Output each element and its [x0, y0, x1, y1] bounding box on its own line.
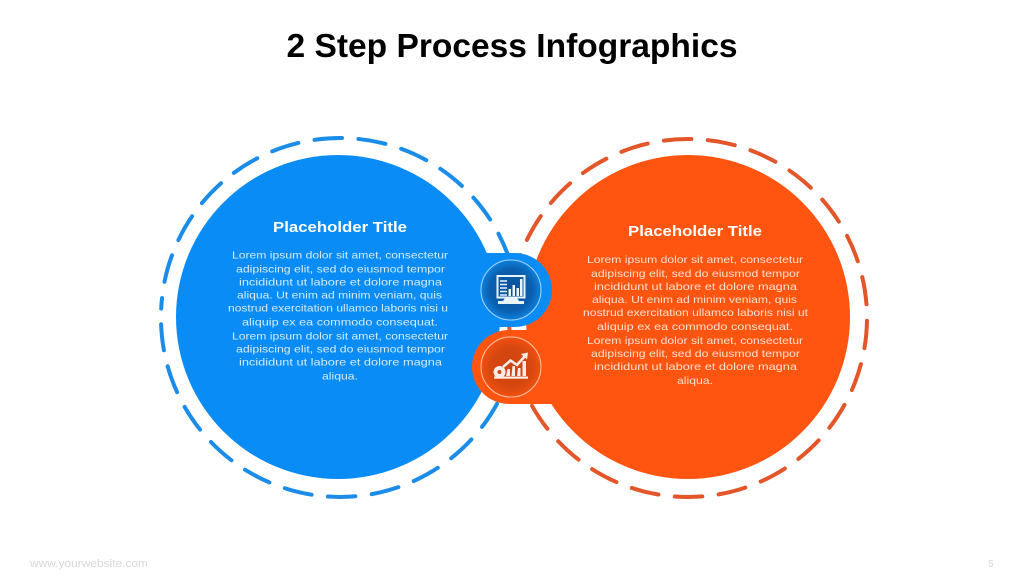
text block: blue panel: aliqua. Ut enim ad minim veniam, quis: [237, 290, 442, 302]
panel: orange circle: [526, 155, 850, 479]
text block: orange panel: incididunt ut labore et dolore magna: [594, 361, 797, 373]
title: 2 Step Process Infographics: [286, 27, 738, 64]
text block: blue panel: [228, 219, 449, 382]
footer: page number: 5: [988, 559, 994, 570]
text block: orange panel: aliqua. Ut enim ad minim veniam, quis: [592, 294, 797, 306]
text block: blue panel: incididunt ut labore et dolore magna: [239, 276, 442, 288]
text block: blue panel: Lorem ipsum dolor sit amet, consectetur: [232, 250, 449, 262]
text block: orange panel: incididunt ut labore et dolore magna: [594, 281, 797, 293]
text block: orange panel: Lorem ipsum dolor sit amet, consectetur: [587, 254, 804, 266]
orange step tab: [472, 330, 553, 404]
text block: blue panel: Lorem ipsum dolor sit amet, consectetur: [232, 330, 449, 342]
text block: blue panel: nostrud exercitation ullamco laboris nisi u: [228, 302, 448, 314]
dashed ring: blue: [161, 138, 519, 497]
heading: blue panel: Placeholder Title: [273, 219, 407, 236]
icon: growth chart with coin: [481, 337, 541, 397]
footer: website: www.yourwebsite.com: [29, 558, 148, 570]
dashed ring: orange: [476, 106, 900, 530]
panel: blue circle: [176, 155, 500, 479]
heading: orange panel: Placeholder Title: [628, 223, 762, 240]
blue step tab: [486, 253, 552, 327]
text block: orange panel: Lorem ipsum dolor sit amet, consectetur: [587, 335, 804, 347]
text block: blue panel: aliquip ex ea commodo consequat.: [242, 316, 438, 328]
text block: blue panel: aliqua.: [322, 370, 358, 382]
icon: monitor with chart: [481, 260, 541, 320]
text block: blue panel: adipiscing elit, sed do eiusmod tempor: [236, 264, 446, 276]
text block: orange panel: [583, 223, 808, 387]
text block: orange panel: nostrud exercitation ullamco laboris nisi ut: [583, 307, 808, 319]
text block: orange panel: adipiscing elit, sed do eiusmod tempor: [591, 348, 801, 360]
text block: blue panel: adipiscing elit, sed do eiusmod tempor: [236, 344, 446, 356]
text block: orange panel: aliqua.: [677, 375, 713, 387]
text block: orange panel: aliquip ex ea commodo consequat.: [597, 321, 793, 333]
text block: orange panel: adipiscing elit, sed do eiusmod tempor: [591, 268, 801, 280]
text block: blue panel: incididunt ut labore et dolore magna: [239, 356, 442, 368]
